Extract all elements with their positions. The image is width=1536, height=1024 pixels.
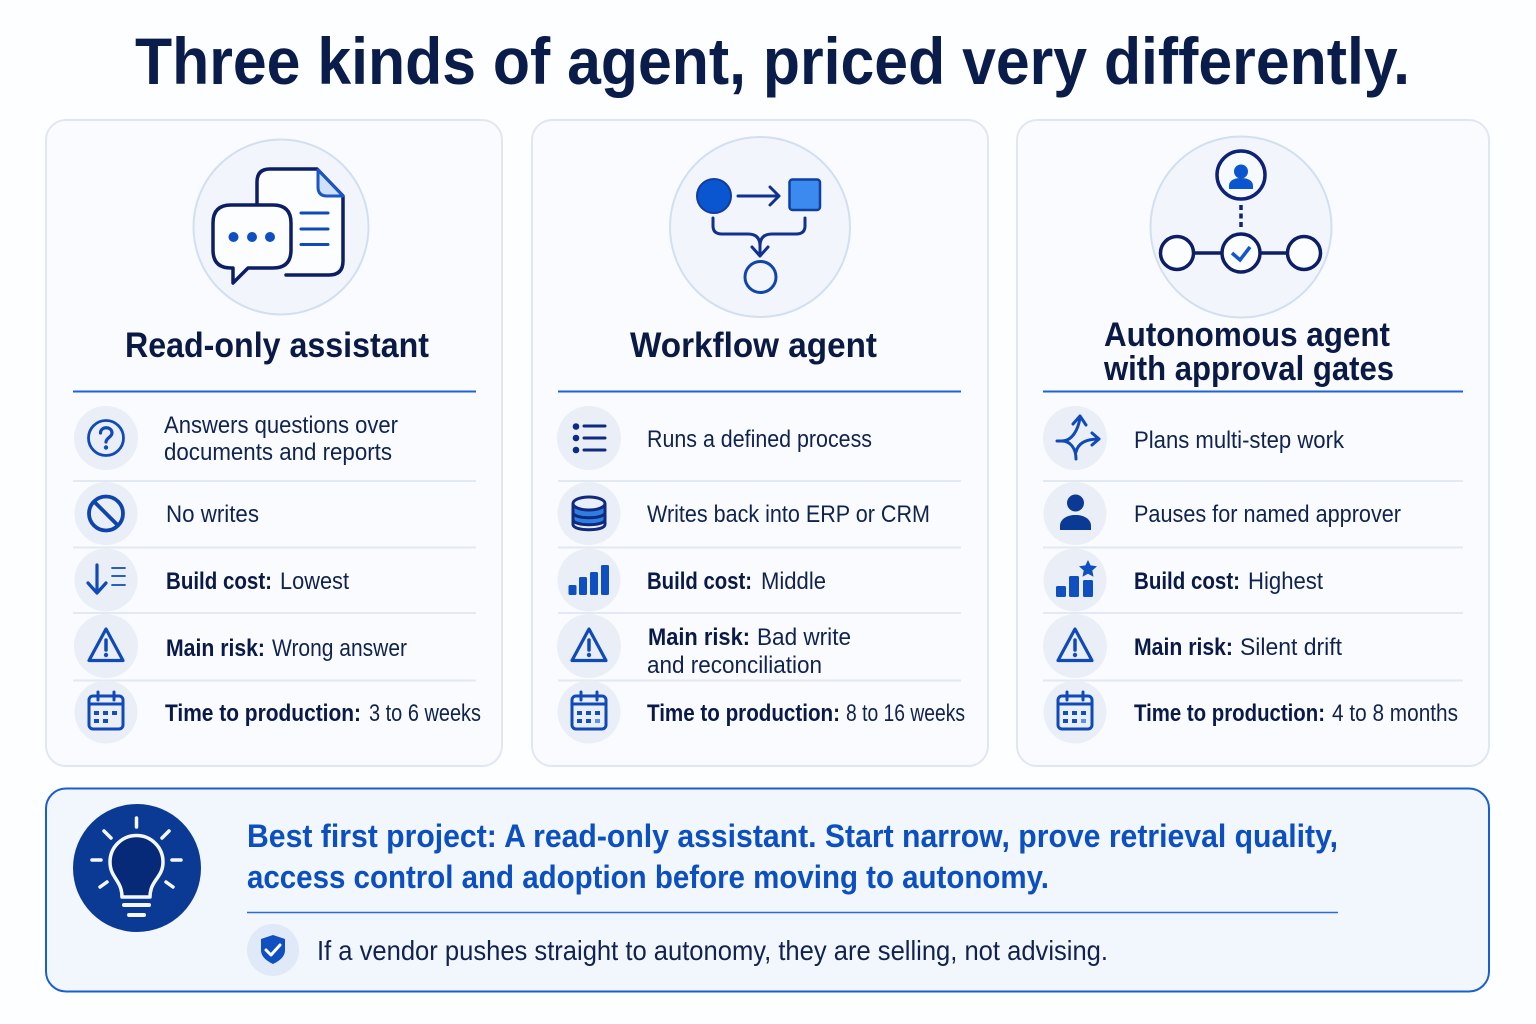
text: callout headline bbox=[247, 818, 1338, 895]
icon: arrow down with list bbox=[74, 548, 138, 612]
text: plans work: Plans multi-step work bbox=[1134, 427, 1345, 454]
text: callout headline: access control and adoption before moving to autonomy. bbox=[247, 859, 1049, 895]
text: time to production: Time to production: bbox=[165, 700, 361, 727]
text: vendor warning: If a vendor pushes straight to autonomy, they are selling, not advising. bbox=[317, 935, 1108, 966]
icon: branching arrows bbox=[1043, 406, 1107, 470]
text: build cost bbox=[166, 568, 349, 595]
text: main risk: Bad write bbox=[757, 624, 851, 651]
icon: database bbox=[558, 482, 620, 545]
text: main risk bbox=[166, 635, 407, 662]
text: build cost bbox=[1134, 568, 1323, 595]
panel: workflow agent bbox=[532, 120, 988, 766]
text: writes back: Writes back into ERP or CRM bbox=[647, 501, 930, 528]
text: build cost: Highest bbox=[1248, 568, 1323, 595]
text: time to production bbox=[1134, 700, 1458, 727]
text: no writes: No writes bbox=[166, 501, 259, 528]
icon: bar chart bbox=[558, 548, 620, 612]
text: time to production: Time to production: bbox=[1134, 700, 1325, 727]
text: time to production: 4 to 8 months bbox=[1332, 700, 1458, 727]
text: build cost: Build cost: bbox=[1134, 568, 1240, 595]
text: pauses: Pauses for named approver bbox=[1134, 501, 1401, 528]
text: answers questions: Answers questions over bbox=[164, 412, 398, 439]
text: build cost: Build cost: bbox=[166, 568, 272, 595]
text: answers questions: documents and reports bbox=[164, 439, 392, 466]
heading: with approval gates bbox=[1103, 350, 1394, 388]
icon: chat and document bbox=[194, 140, 368, 314]
text: main risk: Silent drift bbox=[1240, 634, 1342, 661]
text: time to production: 8 to 16 weeks bbox=[846, 700, 965, 727]
heading bbox=[1103, 316, 1394, 388]
text: main risk: Wrong answer bbox=[272, 635, 407, 662]
icon: warning bbox=[74, 614, 138, 678]
icon: bars with star bbox=[1044, 548, 1106, 612]
icon: calendar bbox=[74, 680, 138, 744]
icon: shield with check bbox=[247, 924, 299, 976]
icon: person bbox=[1044, 482, 1106, 545]
icon: question bbox=[74, 406, 138, 470]
title: Three kinds of agent, priced very differently. bbox=[135, 24, 1410, 98]
text: answers questions bbox=[164, 412, 398, 466]
icon: warning bbox=[557, 614, 621, 678]
text: build cost: Middle bbox=[761, 568, 826, 595]
heading: Read-only assistant bbox=[125, 326, 429, 365]
text: main risk: Main risk: bbox=[648, 624, 750, 651]
icon: calendar bbox=[558, 680, 620, 744]
text: main risk: Main risk: bbox=[166, 635, 265, 662]
panel: read-only assistant bbox=[46, 120, 502, 766]
icon: list bbox=[557, 406, 621, 470]
text: time to production: Time to production: bbox=[647, 700, 840, 727]
heading: Autonomous agent bbox=[1104, 316, 1390, 354]
icon: light bulb bbox=[73, 804, 201, 932]
panel: autonomous agent bbox=[1017, 120, 1489, 766]
text: main risk bbox=[647, 624, 851, 679]
text: build cost: Build cost: bbox=[647, 568, 752, 595]
panel: best first project callout bbox=[46, 788, 1489, 992]
text: main risk bbox=[1134, 634, 1342, 661]
text: build cost bbox=[647, 568, 826, 595]
icon: calendar bbox=[1044, 680, 1106, 744]
text: main risk: Main risk: bbox=[1134, 634, 1233, 661]
text: main risk: and reconciliation bbox=[647, 652, 822, 679]
icon: no entry bbox=[74, 482, 138, 545]
icon: workflow diagram bbox=[670, 137, 850, 317]
text: time to production: 3 to 6 weeks bbox=[369, 700, 481, 727]
text: callout headline: Best first project: A read-only assistant. Start narrow, prove retrieval quality, bbox=[247, 818, 1338, 854]
icon: warning bbox=[1043, 614, 1107, 678]
text: build cost: Lowest bbox=[280, 568, 349, 595]
icon: approval gate diagram bbox=[1150, 136, 1332, 318]
heading: Workflow agent bbox=[630, 326, 877, 365]
text: runs a process: Runs a defined process bbox=[647, 426, 872, 453]
